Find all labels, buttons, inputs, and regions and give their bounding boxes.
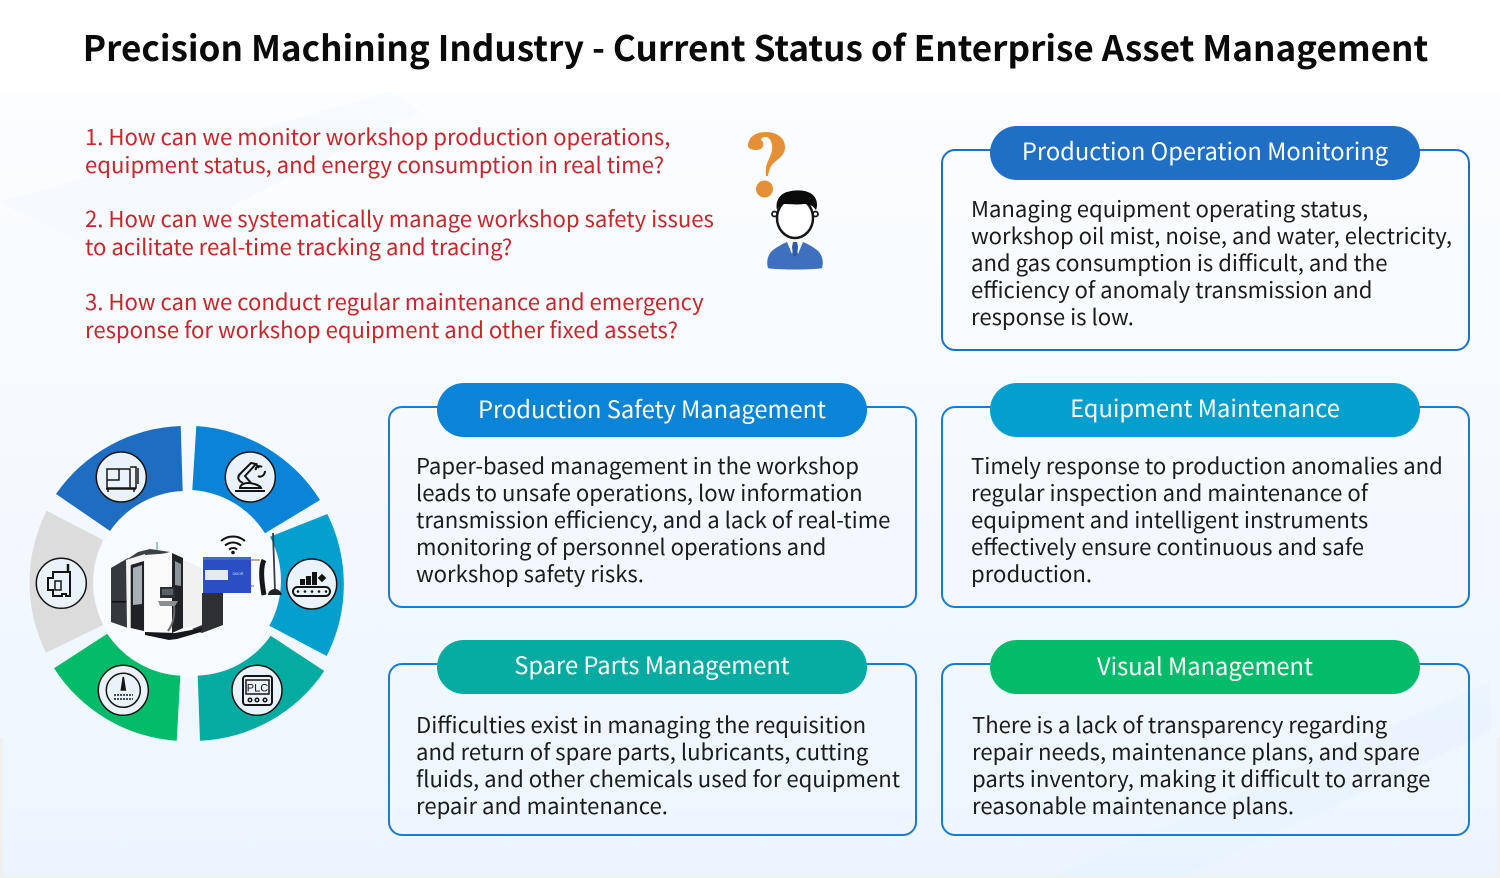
panel: spare parts management: fluids, and other chemicals used for equipment (416, 762, 900, 794)
panel: equipment maintenance (941, 383, 1470, 608)
panel: spare parts management: repair and maintenance. (416, 789, 668, 821)
title: Precision Machining Industry - Current Status of Enterprise Asset Management (83, 21, 1428, 72)
panel: spare parts management: Spare Parts Management (514, 647, 790, 681)
icon: machine tool (96, 452, 146, 502)
panel: spare parts management (388, 640, 917, 836)
panel: production operation monitoring: Managing equipment operating status, (971, 192, 1368, 224)
machining center (111, 542, 223, 640)
segment: cyan (269, 514, 344, 656)
icon: wifi (221, 536, 245, 554)
icon: robot arm (225, 452, 275, 502)
gateway device: SKIOR (233, 572, 244, 576)
panel: production safety management: transmission efficiency, and a lack of real-time (416, 503, 890, 535)
icon: PLC: PLC (247, 682, 268, 694)
panel: production operation monitoring: efficiency of anomaly transmission and (971, 273, 1372, 305)
panel: production safety management: leads to unsafe operations, low information (416, 476, 863, 508)
panel: visual management: repair needs, maintenance plans, and spare (972, 735, 1420, 767)
panel: production safety management: monitoring of personnel operations and (416, 530, 826, 562)
panel: spare parts management: Difficulties exist in managing the requisition (416, 708, 866, 740)
segment: gray (29, 511, 103, 653)
panel: equipment maintenance: Equipment Maintenance (1070, 390, 1340, 424)
panel: production safety management: Paper-based management in the workshop (416, 449, 859, 481)
question 1 (85, 120, 670, 180)
panel: equipment maintenance: equipment and intelligent instruments (971, 503, 1368, 535)
panel: equipment maintenance: production. (971, 557, 1092, 589)
panel: equipment maintenance: effectively ensure continuous and safe (971, 530, 1364, 562)
panel: production safety management (388, 383, 917, 608)
question 1: 1. How can we monitor workshop production operations, (85, 120, 670, 152)
question 2 (85, 202, 714, 262)
panel: visual management: Visual Management (1097, 648, 1313, 682)
panel: visual management (941, 640, 1470, 836)
segment: green (54, 634, 180, 741)
question 1: equipment status, and energy consumption in real time? (85, 148, 664, 180)
question 3 (85, 285, 704, 345)
icon: PLC (232, 665, 282, 715)
panel: production operation monitoring: Production Operation Monitoring (1022, 133, 1388, 167)
icon: person with question mark (748, 132, 823, 270)
ring diagram (30, 426, 344, 741)
icon: circuit module (36, 558, 86, 608)
panel: equipment maintenance: Timely response to production anomalies and (971, 449, 1443, 481)
panel: visual management: There is a lack of transparency regarding (972, 708, 1387, 740)
panel: equipment maintenance: regular inspection and maintenance of (971, 476, 1368, 508)
panel: visual management: reasonable maintenance plans. (972, 789, 1294, 821)
segment: dark blue (56, 426, 183, 531)
panel: production operation monitoring: response is low. (971, 300, 1134, 332)
segment: blue (192, 426, 320, 533)
gateway device (203, 533, 282, 595)
panel: production operation monitoring (941, 126, 1470, 351)
segment: teal (198, 636, 324, 741)
panel: visual management: parts inventory, making it difficult to arrange (972, 762, 1430, 794)
icon: conveyor (287, 559, 337, 609)
question 2: to acilitate real-time tracking and tracing? (85, 230, 512, 262)
panel: spare parts management: and return of spare parts, lubricants, cutting (416, 735, 868, 767)
question 3: response for workshop equipment and other fixed assets? (85, 313, 678, 345)
panel: production safety management: workshop safety risks. (416, 557, 644, 589)
panel: production safety management: Production Safety Management (478, 391, 826, 425)
question 3: 3. How can we conduct regular maintenance and emergency (85, 285, 704, 317)
panel: production operation monitoring: workshop oil mist, noise, and water, electricity, (971, 219, 1452, 251)
panel: production operation monitoring: and gas consumption is difficult, and the (971, 246, 1387, 278)
question 2: 2. How can we systematically manage workshop safety issues (85, 202, 714, 234)
icon: gauge (98, 665, 148, 715)
